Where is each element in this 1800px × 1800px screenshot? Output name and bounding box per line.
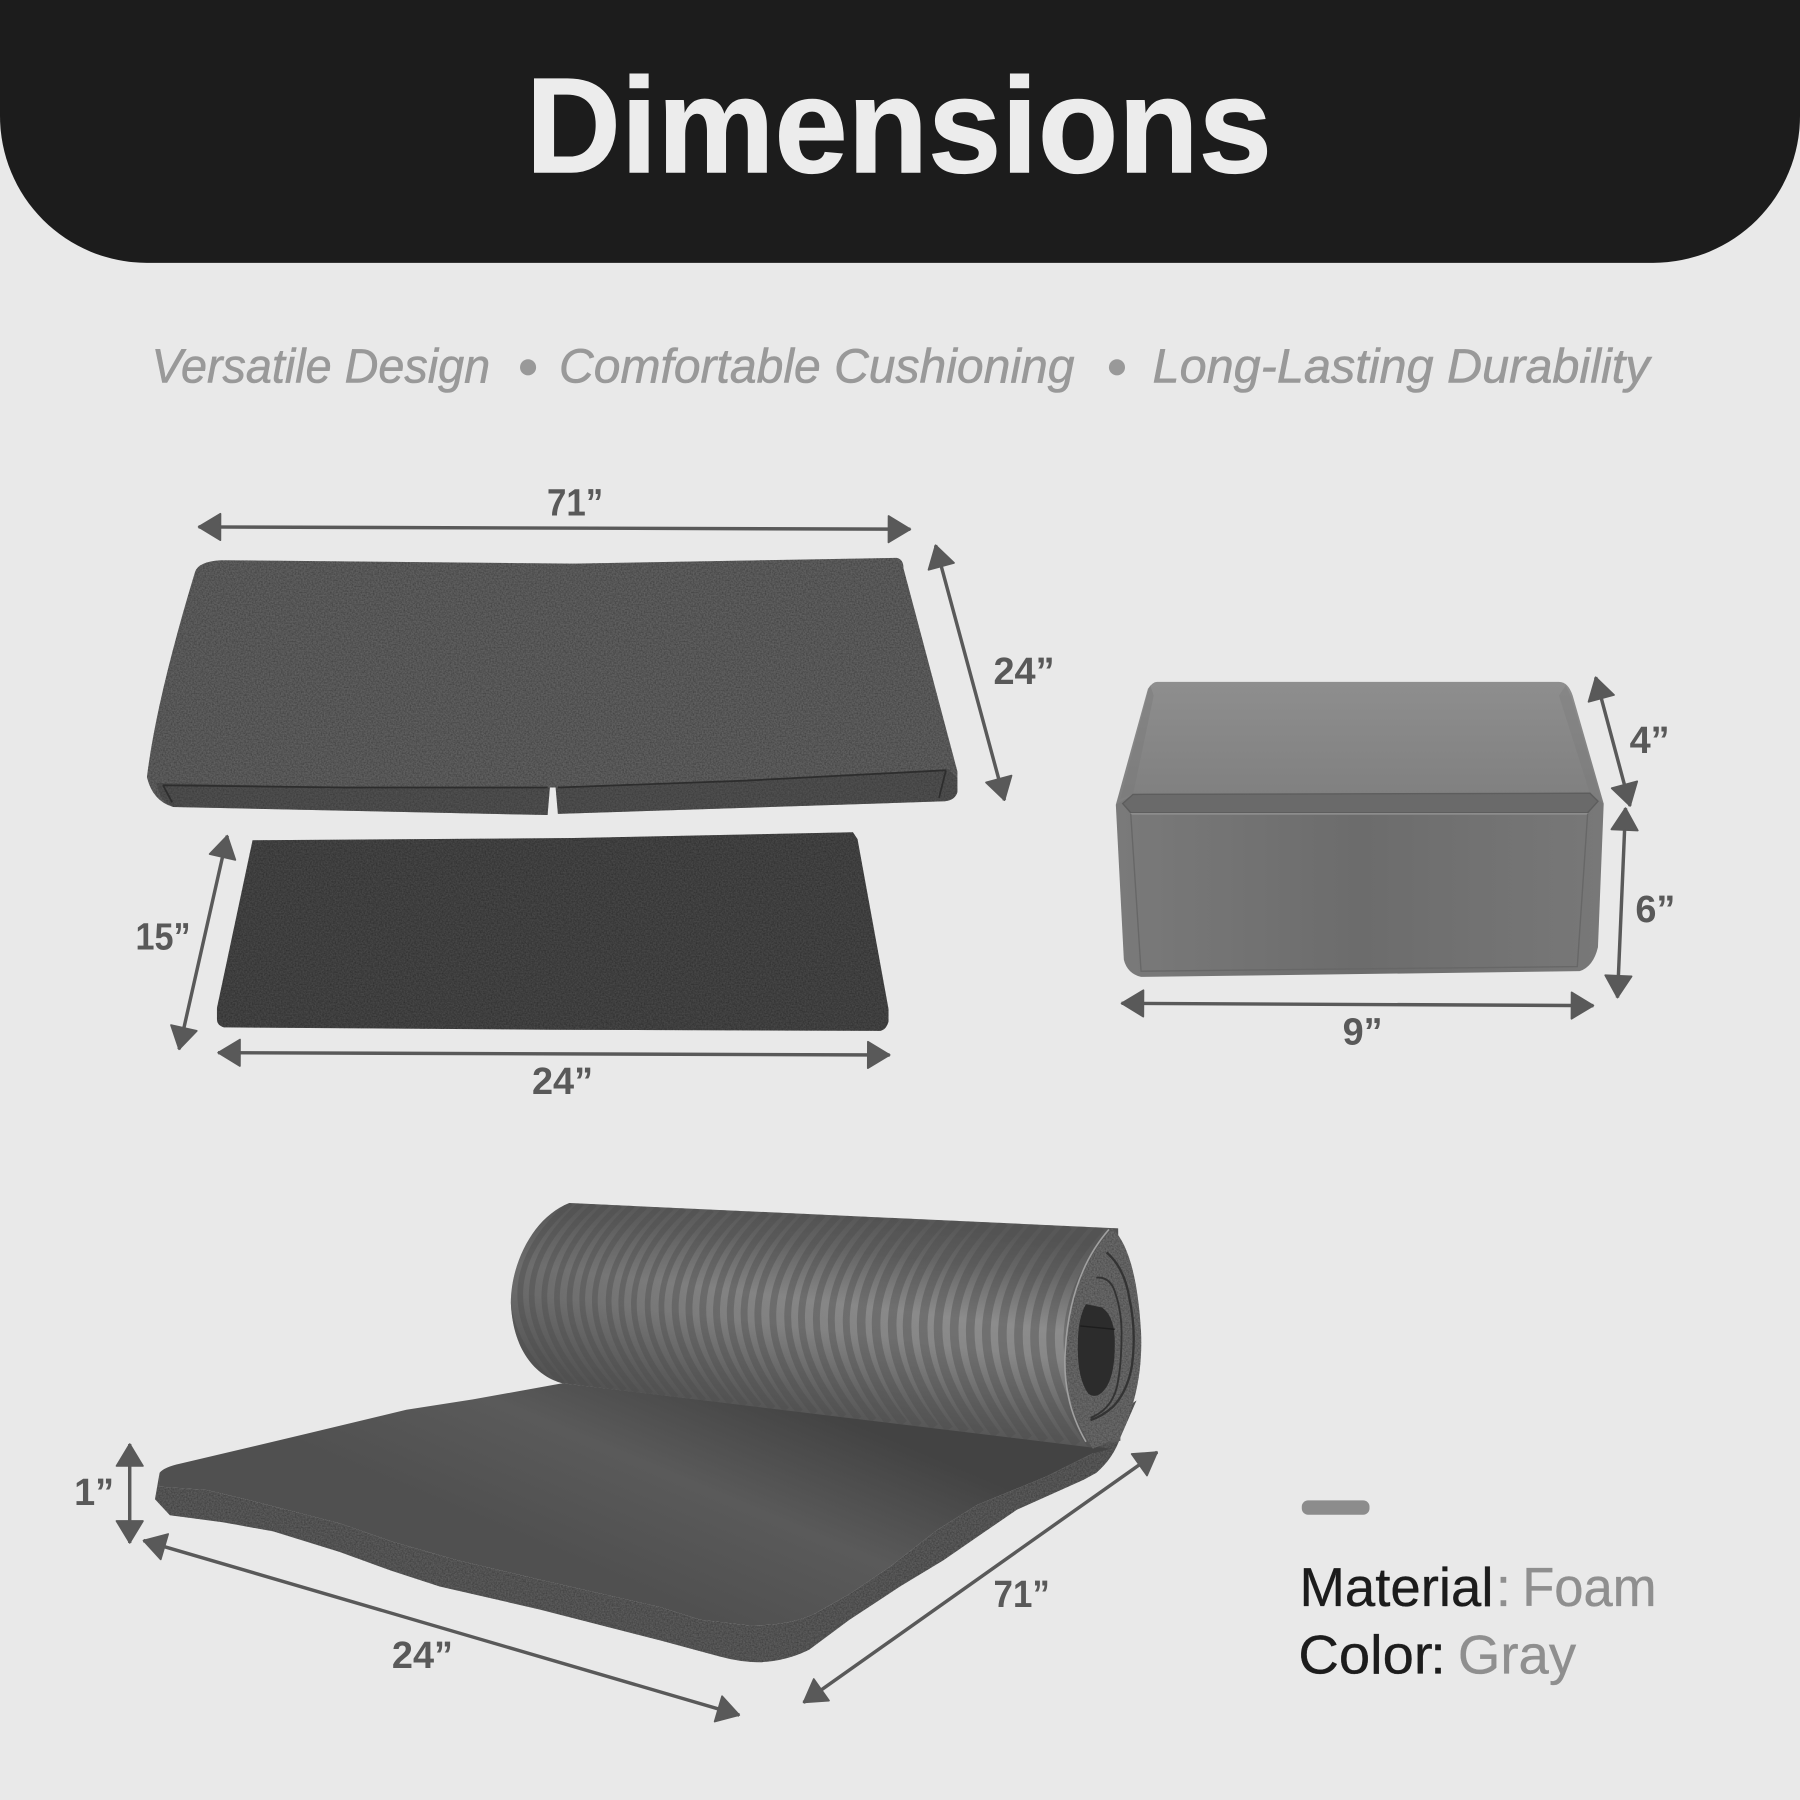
mat top surface: [160, 1383, 1111, 1626]
material and color specs: :: [1430, 1624, 1446, 1686]
dimension: block depth: [1596, 677, 1670, 806]
panel: rolled mat: [155, 1203, 1141, 1662]
dimension: mat thickness: [74, 1444, 130, 1543]
dimension: large towel width: 71”: [547, 482, 603, 524]
material and color specs: [1298, 1556, 1657, 1686]
material and color specs: Foam: [1522, 1556, 1657, 1618]
mat foam edge: [155, 1401, 1136, 1662]
title: Dimensions: [526, 49, 1272, 201]
panel: small towel: [217, 832, 889, 1031]
block top face: [1116, 682, 1604, 805]
material and color specs: Color: [1298, 1624, 1433, 1686]
material and color specs: :: [1496, 1556, 1511, 1618]
dimension: mat width: [143, 1541, 739, 1715]
roll wrap lines: [1091, 1252, 1134, 1420]
roll cap rim: [1065, 1229, 1109, 1442]
roll end cap: [1065, 1228, 1141, 1449]
subtitle features: [152, 339, 1653, 393]
towel body: [147, 558, 957, 815]
subtitle features: Long-Lasting Durability: [1153, 339, 1653, 393]
dimension: large towel depth: 24”: [993, 651, 1055, 693]
subtitle features: Versatile Design: [152, 339, 490, 393]
dimension: small towel width: 24”: [532, 1061, 593, 1103]
dimension: large towel depth: [936, 545, 1055, 800]
subtitle features: Comfortable Cushioning: [559, 339, 1075, 393]
material and color specs: Gray: [1458, 1624, 1577, 1686]
roll body: [511, 1203, 1120, 1448]
panel: large towel: [147, 558, 957, 815]
dimension: mat length: 71”: [994, 1574, 1050, 1616]
panel: yoga block: [1116, 682, 1604, 977]
dimension: small towel height: 15”: [135, 916, 191, 958]
material and color specs: Material: [1299, 1556, 1493, 1618]
roll side shading: [511, 1203, 1120, 1448]
roll ribs: [508, 1203, 1118, 1448]
header banner: [0, 0, 1800, 263]
dimension: small towel height: [135, 836, 227, 1049]
dimension: mat length: [804, 1452, 1157, 1702]
dimension: block height: 6”: [1635, 889, 1675, 931]
dimension: mat width: 24”: [392, 1635, 453, 1677]
block bevel: [1123, 793, 1598, 813]
dimension: block width: 9”: [1343, 1012, 1383, 1054]
dimension: mat thickness: 1”: [74, 1472, 114, 1514]
block side strips of top: [1120, 685, 1154, 799]
dimension: block depth: 4”: [1630, 720, 1670, 762]
block panel edges: [1131, 814, 1588, 971]
dimension: block height: [1617, 808, 1675, 998]
legend accent bar: [1302, 1500, 1370, 1515]
roll core hole: [1078, 1304, 1115, 1396]
towel front fold: [156, 769, 957, 815]
block front face: [1116, 793, 1604, 977]
